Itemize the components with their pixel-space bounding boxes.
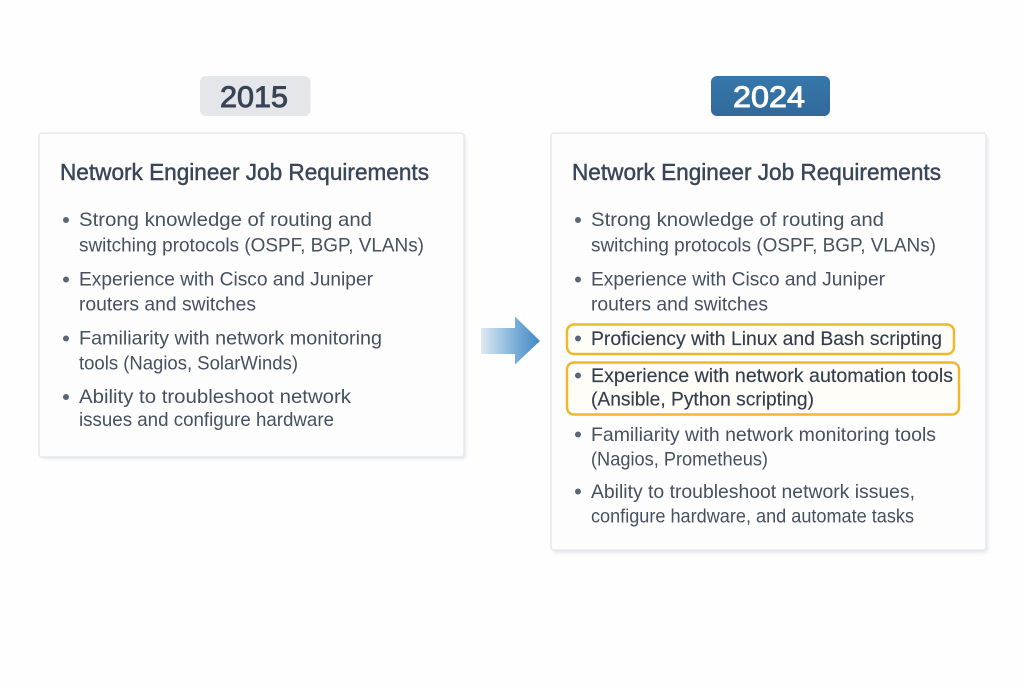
requirement: Cisco and Juniper: routers and switches [79, 294, 256, 316]
requirement: troubleshooting: issues and configure hardware [79, 409, 334, 431]
year badge: 2015: 2015 [220, 81, 288, 114]
requirement: monitoring tools [63, 328, 382, 374]
requirement: routing and switching [575, 209, 936, 256]
highlighted requirement: automation tools [567, 362, 959, 414]
requirement: troubleshooting and automation: Ability to troubleshoot network issues, [591, 481, 915, 503]
requirement: routing and switching: Strong knowledge of routing and [79, 209, 372, 231]
requirement: Cisco and Juniper: Experience with Cisco and Juniper [79, 268, 373, 290]
requirement: routing and switching: switching protocols (OSPF, BGP, VLANs) [591, 234, 936, 256]
requirement: troubleshooting and automation: configure hardware, and automate tasks [591, 506, 914, 528]
requirement: troubleshooting and automation [575, 481, 915, 528]
requirement: monitoring tools: (Nagios, Prometheus) [591, 448, 768, 470]
requirement: routing and switching: switching protocols (OSPF, BGP, VLANs) [79, 234, 424, 256]
requirement: troubleshooting [63, 386, 351, 431]
panel: 2015 job requirements [39, 133, 466, 459]
heading: 2024 panel title: Network Engineer Job Requirements [572, 159, 941, 185]
requirement: monitoring tools: Familiarity with network monitoring [79, 328, 382, 350]
year badge: 2024 [711, 76, 830, 116]
highlighted requirement: automation tools: Experience with network automation tools [591, 365, 953, 387]
requirement: troubleshooting: Ability to troubleshoot network [79, 386, 351, 408]
highlighted requirement: Linux and Bash [567, 324, 954, 354]
requirement: Cisco and Juniper: Experience with Cisco and Juniper [591, 268, 885, 290]
heading: 2015 panel title: Network Engineer Job Requirements [60, 159, 429, 185]
requirement: monitoring tools [575, 424, 936, 470]
panel: 2024 job requirements [551, 133, 988, 553]
requirement: monitoring tools: Familiarity with network monitoring tools [591, 424, 936, 446]
highlighted requirement: Linux and Bash: Proficiency with Linux and Bash scripting [591, 328, 942, 350]
requirement: monitoring tools: tools (Nagios, SolarWinds) [79, 352, 298, 374]
requirement: routing and switching [63, 209, 424, 256]
year badge: 2015 [200, 76, 310, 116]
requirement: Cisco and Juniper: routers and switches [591, 294, 768, 316]
year badge: 2024: 2024 [733, 81, 805, 114]
arrow: 2015 to 2024 [481, 316, 540, 364]
requirement: Cisco and Juniper [63, 268, 373, 316]
highlighted requirement: automation tools: (Ansible, Python scripting) [591, 388, 814, 410]
requirement: routing and switching: Strong knowledge of routing and [591, 209, 884, 231]
requirement: Cisco and Juniper [575, 268, 885, 316]
